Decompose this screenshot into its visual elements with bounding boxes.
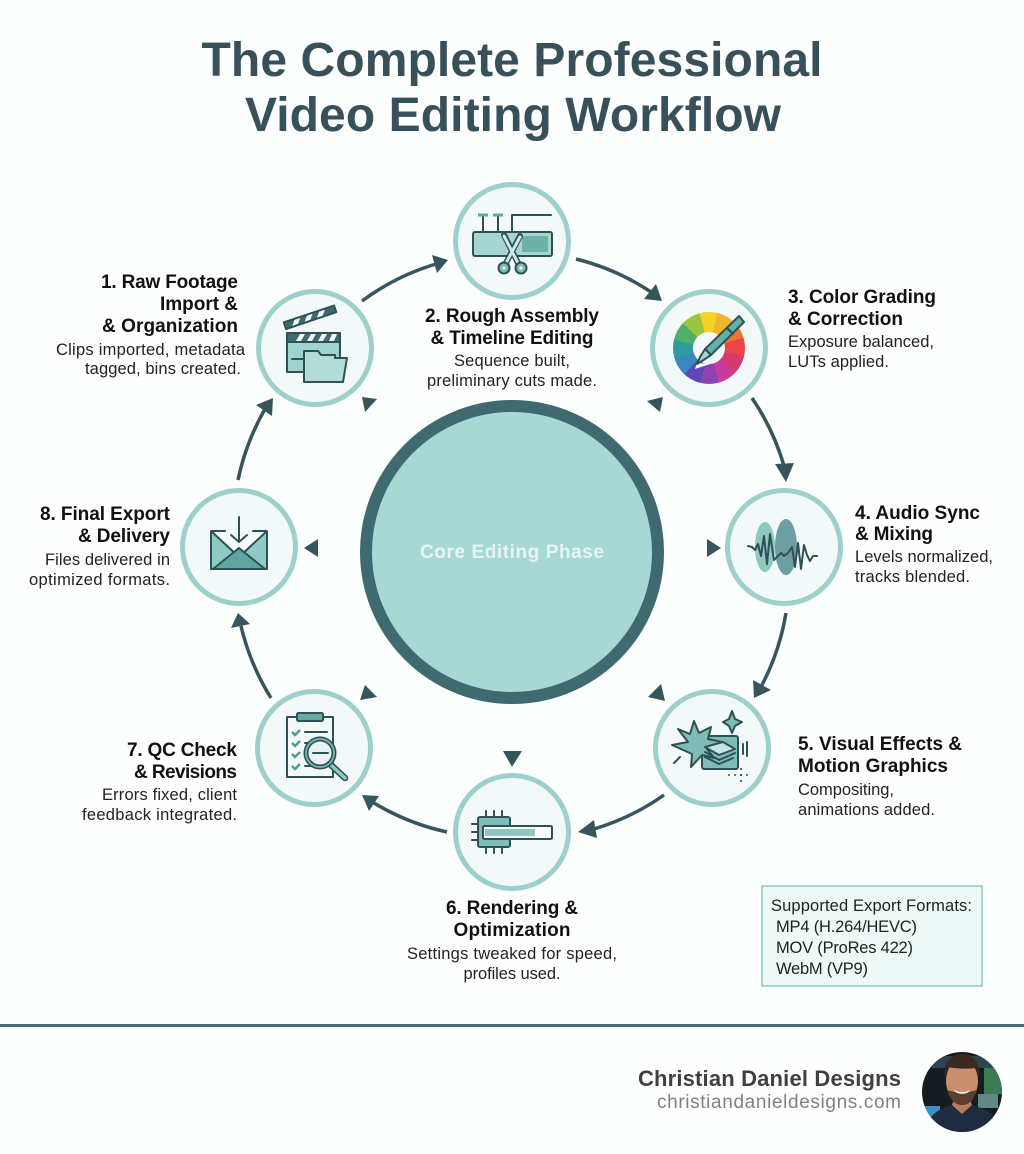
step 3 text: & Correction: [788, 309, 903, 330]
step 4 text: Levels normalized,: [855, 548, 993, 566]
step 1 text: Clips imported, metadata: [56, 341, 246, 359]
step 3 node: colour wheel and pen icon: [652, 292, 766, 404]
inner pointers around the core circle: [304, 397, 721, 767]
footer portrait: [922, 1052, 1002, 1132]
step 7 text: feedback integrated.: [82, 806, 237, 824]
arrow: step 8 to step 1: [238, 398, 273, 480]
arrow: step 7 to step 8: [231, 613, 271, 698]
step 2 text: 2. Rough Assembly: [425, 306, 599, 327]
arrow: step 1 to step 2: [362, 255, 448, 301]
step 1 text: & Organization: [102, 316, 238, 337]
footer brand text: Christian Daniel Designs: [638, 1066, 901, 1091]
step 7 node: checklist and magnifier icon: [258, 692, 370, 804]
callout: supported export formats: MP4 (H.264/HEVC): [776, 918, 917, 936]
step 4 node: audio waveform icon: [728, 490, 840, 604]
step 2 text: preliminary cuts made.: [427, 372, 597, 390]
footer brand text: christiandanieldesigns.com: [657, 1092, 901, 1113]
step 1 text: Import &: [160, 294, 238, 315]
step 8 text: [29, 504, 171, 589]
step 1 text: 1. Raw Footage: [101, 272, 238, 293]
title: [202, 34, 822, 142]
step 2 text: Sequence built,: [454, 352, 570, 370]
step 1 node: clapperboard and folder icon: [258, 292, 372, 404]
step 5 text: Motion Graphics: [798, 756, 948, 777]
step 2 text: & Timeline Editing: [430, 328, 594, 349]
step 5 text: 5. Visual Effects &: [798, 734, 962, 755]
step 6 text: 6. Rendering &: [446, 898, 578, 919]
step 4 text: 4. Audio Sync: [855, 503, 980, 524]
step 6 text: profiles used.: [464, 965, 560, 983]
step 4 text: [855, 503, 993, 586]
step 6 text: Optimization: [454, 920, 570, 941]
step 2 node: timeline and scissors icon: [456, 184, 568, 298]
footer brand text: [638, 1066, 901, 1113]
step 2 text: [425, 306, 599, 390]
step 7 text: 7. QC Check: [127, 740, 237, 761]
step 4 text: & Mixing: [855, 524, 933, 545]
arrow: step 4 to step 5: [753, 613, 786, 698]
step 5 text: [798, 734, 962, 819]
step 5 text: animations added.: [798, 801, 935, 819]
arrow: step 3 to step 4: [752, 398, 794, 482]
callout: supported export formats: Supported Export Formats:: [771, 897, 972, 915]
arrow: step 2 to step 3: [576, 259, 662, 301]
step 7 text: [82, 740, 237, 824]
title: The Complete Professional: [202, 34, 822, 87]
step 6 text: [407, 898, 617, 983]
step 1 text: tagged, bins created.: [85, 360, 241, 378]
step 6 node: rendering chip and progress bar icon: [456, 776, 568, 888]
step 8 text: 8. Final Export: [40, 504, 171, 525]
central circle: core editing phase: [366, 406, 658, 698]
step 4 text: tracks blended.: [855, 568, 970, 586]
arrow: step 5 to step 6: [578, 795, 664, 838]
step 8 node: envelope with download arrow icon: [182, 490, 296, 604]
step 3 text: [788, 287, 936, 371]
step 3 text: 3. Color Grading: [788, 287, 936, 308]
step 5 node: visual effects icon: [656, 692, 768, 804]
step 3 text: Exposure balanced,: [788, 333, 934, 351]
step 5 text: Compositing,: [798, 781, 894, 799]
step 7 text: & Revisions: [134, 762, 237, 783]
step 3 text: LUTs applied.: [788, 353, 889, 371]
step 8 text: & Delivery: [78, 526, 170, 547]
callout: supported export formats: WebM (VP9): [776, 960, 868, 978]
step 6 text: Settings tweaked for speed,: [407, 945, 617, 963]
step 8 text: Files delivered in: [45, 551, 170, 569]
central circle: core editing phase: Core Editing Phase: [420, 542, 604, 563]
step 8 text: optimized formats.: [29, 571, 170, 589]
step 1 text: [56, 272, 246, 378]
callout: supported export formats: [762, 886, 982, 986]
arrow: step 6 to step 7: [362, 795, 447, 832]
callout: supported export formats: MOV (ProRes 422): [776, 939, 913, 957]
title: Video Editing Workflow: [245, 89, 782, 142]
step 7 text: Errors fixed, client: [102, 786, 237, 804]
